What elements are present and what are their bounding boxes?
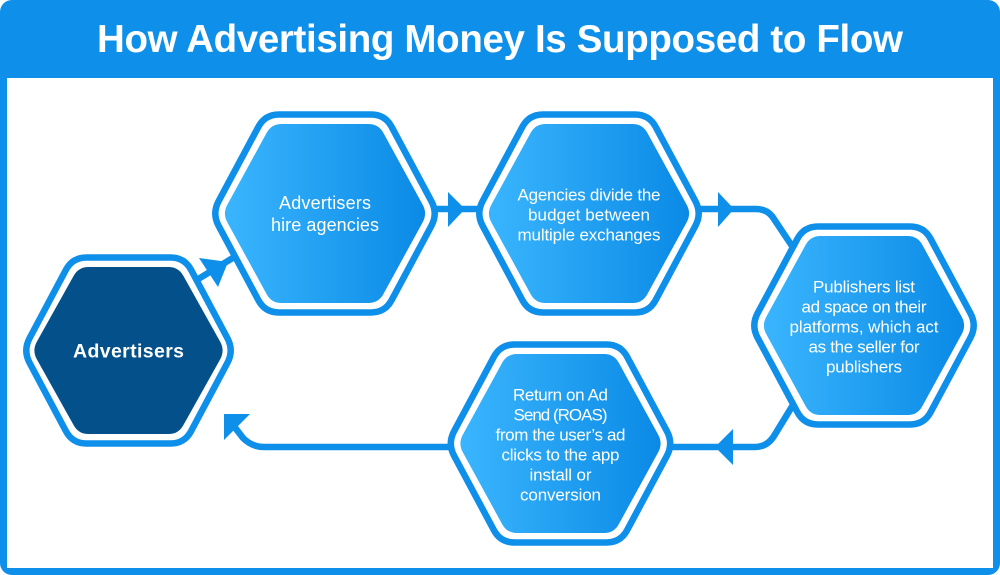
hexagon: return on ad send: Send (ROAS): [514, 406, 608, 424]
hexagon: advertisers: Advertisers: [73, 340, 184, 362]
hexagon: publishers list ad space: platforms, which act: [790, 318, 939, 336]
hexagon: return on ad send: Return on Ad: [513, 386, 608, 404]
hexagon: advertisers hire agencies: hire agencies: [271, 215, 379, 235]
hexagon: return on ad send: install or: [530, 466, 592, 484]
hexagon: advertisers hire agencies: [215, 114, 435, 312]
hexagon: return on ad send: from the user’s ad: [496, 426, 626, 444]
hexagon: publishers list ad space: [754, 226, 974, 424]
arrow: agencies to exchanges: [435, 192, 480, 227]
hexagon: return on ad send: conversion: [520, 486, 601, 504]
hexagon: return on ad send: clicks to the app: [502, 446, 620, 464]
arrow: advertisers to agencies: [195, 256, 236, 287]
hexagon: publishers list ad space: Publishers list: [813, 278, 915, 296]
hexagon: advertisers: [26, 258, 231, 444]
hexagon: agencies divide the budget: multiple exchanges: [518, 226, 660, 244]
hexagon: publishers list ad space: ad space on their: [802, 298, 927, 316]
hexagon: publishers list ad space: as the seller for: [808, 338, 920, 356]
arrow: exchanges to publishers: [699, 192, 796, 252]
hexagon: agencies divide the budget: Agencies divide the: [518, 186, 660, 204]
hexagon: return on ad send: [451, 344, 670, 542]
arrow: return on ad spend to advertisers: [224, 414, 452, 447]
arrow: publishers to return on ad spend: [670, 400, 796, 465]
hexagon: advertisers hire agencies: Advertisers: [279, 193, 371, 213]
title: How Advertising Money Is Supposed to Flow: [97, 18, 904, 61]
hexagon: agencies divide the budget: budget between: [528, 206, 650, 224]
hexagon: agencies divide the budget: [479, 114, 699, 312]
hexagon: publishers list ad space: publishers: [826, 358, 902, 376]
